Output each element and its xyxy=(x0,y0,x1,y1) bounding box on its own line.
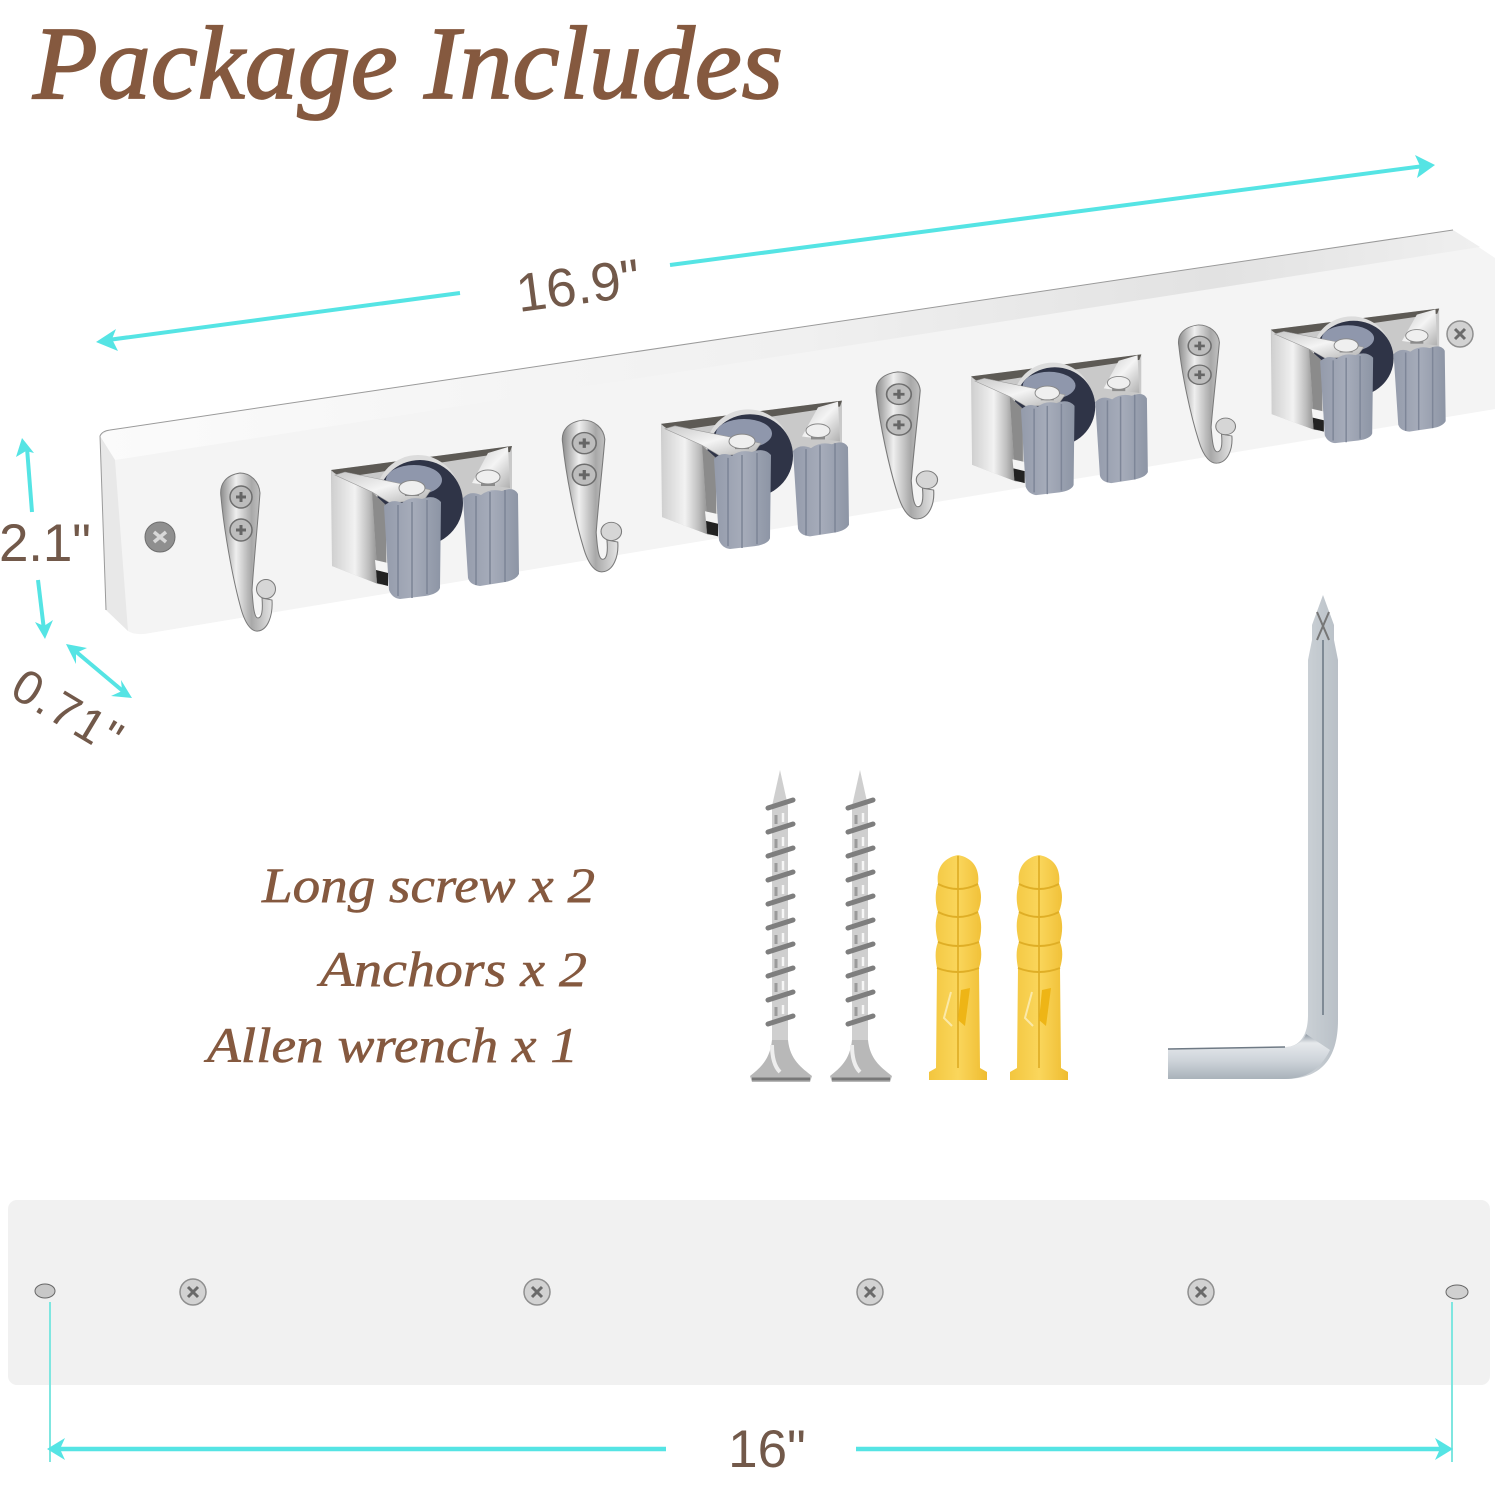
clamp 3 xyxy=(971,354,1148,495)
icon: anchor 1 xyxy=(929,855,987,1080)
icon: anchor 2 xyxy=(1010,855,1068,1080)
hook 4 xyxy=(1178,325,1236,463)
label: 16 in: 16" xyxy=(728,1420,806,1479)
clamp 1 xyxy=(331,446,519,599)
screw 4 xyxy=(1188,1279,1214,1305)
panel: back view of rack xyxy=(8,1200,1490,1385)
arrow: overall length 16.9 in xyxy=(96,155,1435,351)
text: allen wrench: Allen wrench x 1 xyxy=(204,1017,578,1073)
clamp 2 xyxy=(661,401,849,549)
panel: mounting rack with clamps and hooks xyxy=(100,230,1495,634)
rack body xyxy=(100,230,1495,634)
label: 16.9 in: 16.9" xyxy=(513,248,644,324)
screw 3 xyxy=(857,1279,883,1305)
title: Package Includes xyxy=(32,6,783,121)
arrow: width 16 in xyxy=(47,1302,1453,1462)
icon: long screw 1 xyxy=(750,770,812,1082)
text: long screw: Long screw x 2 xyxy=(261,857,595,913)
hook 3 xyxy=(876,372,938,519)
arrow: depth 0.71 in xyxy=(66,644,132,698)
hook 1 xyxy=(221,473,276,631)
hook 2 xyxy=(562,420,622,572)
back plate xyxy=(8,1200,1490,1385)
label: 0.71 in: 0.71" xyxy=(2,659,133,766)
keyhole pin left xyxy=(35,1284,55,1298)
arrow: height 2.1 in xyxy=(16,438,53,639)
screw 1 xyxy=(180,1279,206,1305)
icon: long screw 2 xyxy=(830,770,892,1082)
icon: allen wrench xyxy=(1168,595,1338,1079)
label: 2.1 in: 2.1" xyxy=(0,514,91,573)
clamp 4 xyxy=(1271,308,1446,443)
text: anchors: Anchors x 2 xyxy=(317,941,587,997)
keyhole pin right xyxy=(1446,1285,1468,1299)
screw 2 xyxy=(524,1279,550,1305)
end screw right xyxy=(1447,321,1473,347)
end screw left xyxy=(145,522,175,552)
